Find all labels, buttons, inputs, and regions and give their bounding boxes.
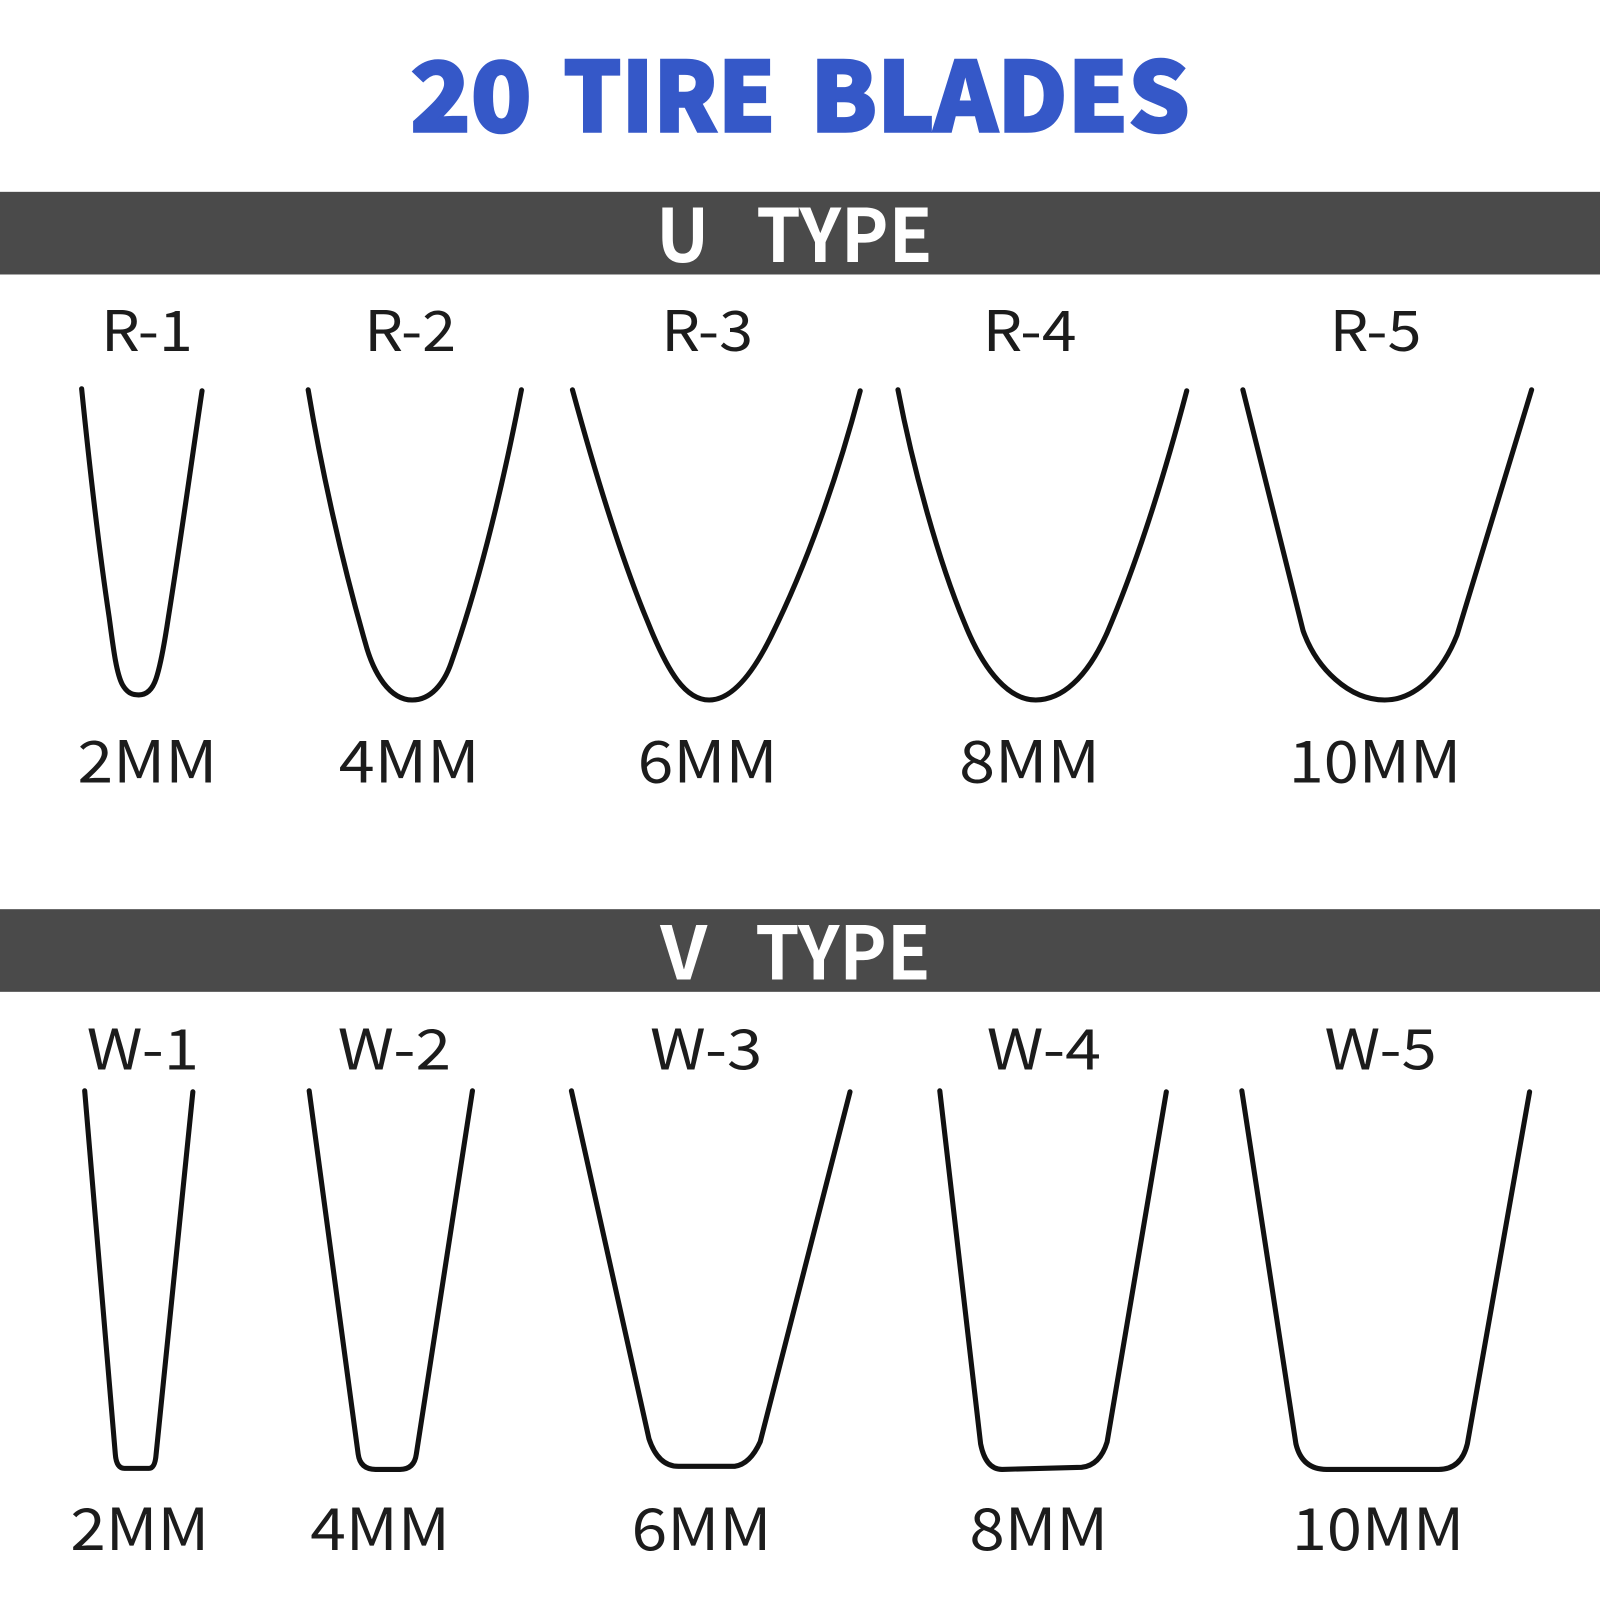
blade W-4: 8MM	[969, 1483, 1108, 1567]
blade W-1: 2MM	[70, 1483, 209, 1567]
title: TIRE	[563, 21, 776, 160]
blade R-2: 4MM	[339, 716, 480, 800]
blade W-3: W-3	[650, 1005, 762, 1086]
heading band: V type: V	[659, 896, 708, 1002]
panel: U type	[0, 178, 1600, 800]
blade W-5: 10MM	[1292, 1483, 1464, 1567]
blade W-2: W-2	[338, 1005, 451, 1086]
blade R-1: R-1	[101, 287, 193, 368]
panel: V type	[0, 896, 1600, 1567]
blade W-2: 4MM	[310, 1483, 450, 1567]
heading band: V type: TYPE	[755, 896, 931, 1002]
heading band: U type	[0, 178, 1600, 284]
blade W-1: W-1	[87, 1005, 199, 1086]
blade R-5: R-5	[1330, 287, 1421, 368]
blade W-1	[70, 1005, 209, 1567]
blade W-3	[571, 1005, 850, 1567]
title: 20	[410, 21, 532, 160]
title: BLADES	[810, 21, 1190, 160]
blade R-5	[1243, 287, 1532, 800]
heading band: U type: TYPE	[756, 178, 933, 284]
blade R-4: 8MM	[959, 716, 1100, 800]
blade W-4: W-4	[987, 1005, 1101, 1086]
blade R-4	[898, 287, 1187, 800]
blade W-4	[940, 1005, 1166, 1567]
blade R-1: 2MM	[78, 716, 217, 800]
heading band: U type: U	[656, 178, 709, 284]
blade R-3	[572, 287, 860, 800]
blade R-2	[308, 287, 521, 800]
heading band: V type	[0, 896, 1600, 1002]
blade R-2: R-2	[364, 287, 456, 368]
blade R-5: 10MM	[1289, 716, 1461, 800]
blade W-3: 6MM	[632, 1483, 771, 1567]
blade W-5: W-5	[1324, 1005, 1437, 1086]
blade R-1	[78, 287, 217, 800]
blade W-2	[309, 1005, 472, 1567]
blade R-3: R-3	[661, 287, 753, 368]
blade R-3: 6MM	[638, 716, 778, 800]
title	[410, 21, 1190, 160]
blade W-5	[1242, 1005, 1530, 1567]
blade R-4: R-4	[983, 287, 1077, 368]
